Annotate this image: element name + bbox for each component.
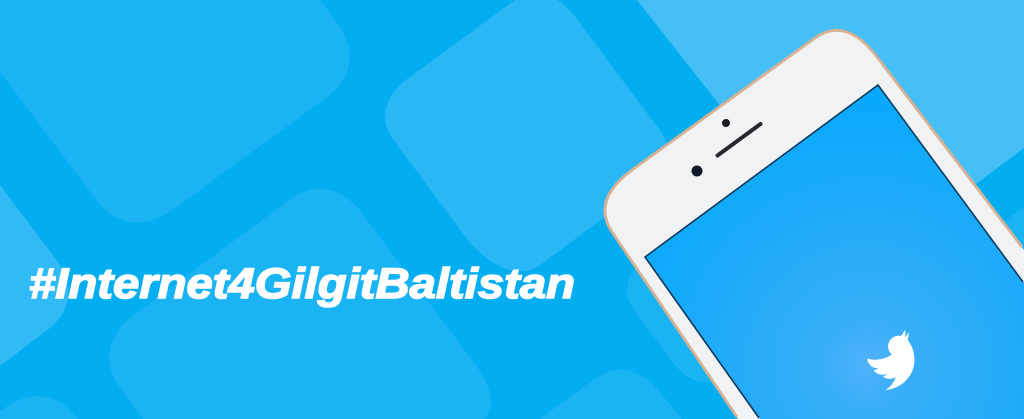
shape: lower centre square bbox=[109, 189, 491, 419]
shape: right edge square bbox=[1000, 207, 1024, 260]
icon: smartphone bbox=[605, 30, 1024, 419]
shape: left edge square bbox=[0, 185, 68, 366]
icon: twitter bird bbox=[863, 328, 931, 394]
title: hashtag: #Internet4GilgitBaltistan bbox=[29, 260, 575, 308]
phone screen edge bbox=[645, 85, 1023, 418]
phone sensor bbox=[722, 119, 730, 127]
shape: bottom left square bbox=[0, 396, 78, 419]
shape: top left square bbox=[0, 0, 350, 222]
phone gold rim bbox=[605, 30, 1022, 417]
phone body bbox=[605, 30, 1024, 419]
phone speaker bbox=[718, 124, 760, 156]
shape: centre square bbox=[385, 0, 670, 271]
shape: bottom centre square bbox=[540, 370, 682, 419]
phone screen bbox=[645, 85, 1024, 419]
phone camera bbox=[692, 166, 702, 176]
shape: square behind phone bbox=[627, 258, 760, 383]
shape: top right square bbox=[637, 0, 1024, 200]
